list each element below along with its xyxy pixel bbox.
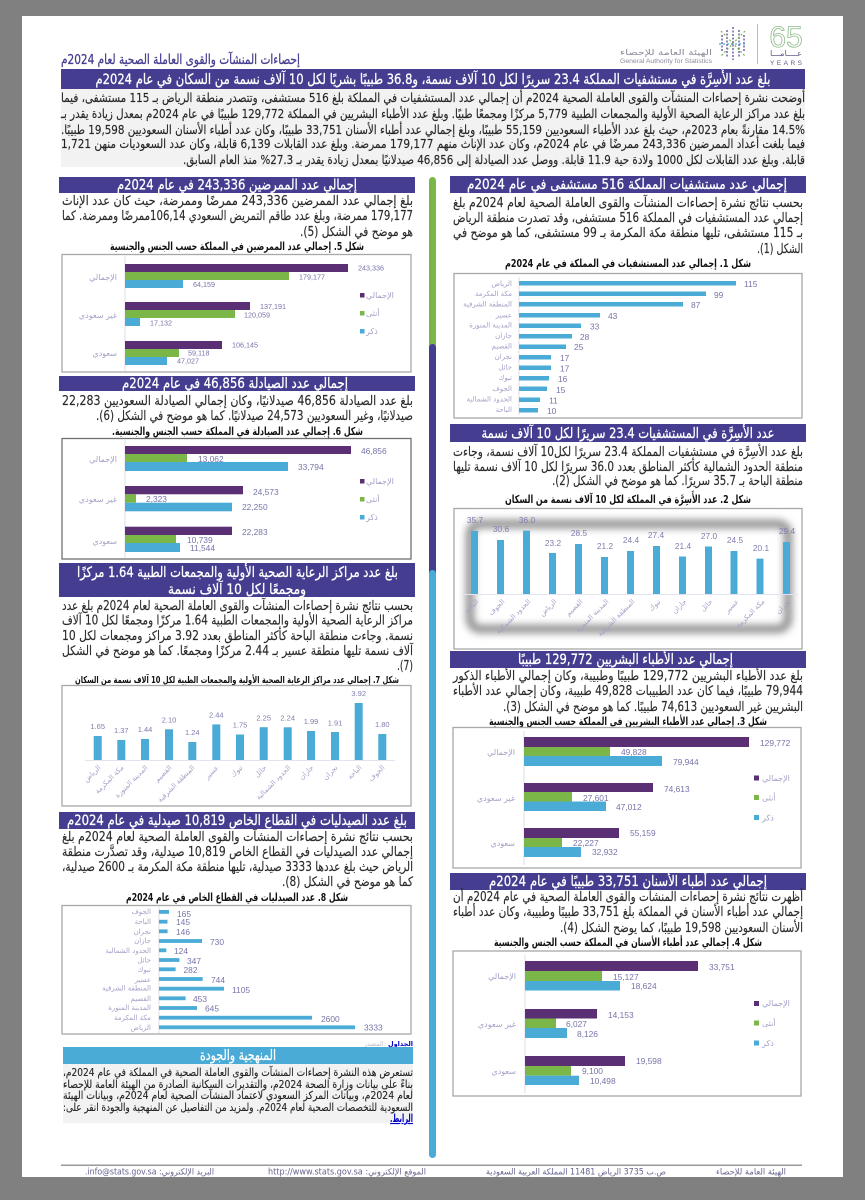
text block: physicians: بلغ عدد الأطباء البشريين 129,772 طبيبًا وطبيبة، وكان إجمالي الأطباء الذكور	[452, 667, 803, 684]
text block: beds: بلغ عدد الأسِرَّة في مستشفيات المملكة 23.4 سريرًا لكل10 آلاف نسمة، وجاءت	[453, 443, 803, 460]
panel: pharmacies	[59, 812, 415, 1048]
column chart: centres per 10,000: 2.25	[256, 714, 271, 722]
column chart: centres per 10,000: الباحة	[346, 764, 363, 781]
logo: General Authority for Statistics 65 years: General Authority for Statistics	[620, 59, 712, 65]
bar chart: nurses by sex and nationality: 64,159	[193, 280, 215, 289]
caption: figure 6: شكل 6. إجمالي عدد الصيادلة في المملكة حسب الجنس والجنسية.	[112, 425, 363, 438]
panel: primary care centres	[59, 563, 415, 806]
column chart: beds per 10,000	[454, 508, 802, 649]
column chart: beds per 10,000: 28.5	[571, 528, 587, 538]
panel: methodology and quality	[63, 1047, 413, 1125]
intro paragraph: فيما بلغت أعداد الممرضين 243,336 ممرضًا في عام 2024م، وكان عدد الإناث منهم 179,177 ممرضة. وبلغ عدد القابلات 6,139 قابلة، وكان عدد السعوديات منهن 1,721	[61, 135, 805, 152]
column chart: beds per 10,000: الجوف	[487, 598, 506, 617]
bar chart: hospitals by region: عسير	[495, 312, 512, 320]
bar chart: pharmacists by sex and nationality: 33,794	[298, 462, 324, 472]
bar chart: nurses by sex and nationality	[62, 254, 411, 372]
bar chart: pharmacies by region: الجوف	[132, 908, 151, 916]
bar chart: dentists by sex and nationality: 6,027	[566, 1019, 587, 1029]
text block: hospitals: بحسب نتائج نشرة إحصاءات المنشآت والقوى العاملة الصحية لعام 2024م بلغ	[453, 194, 803, 211]
column chart: beds per 10,000: 30.6	[493, 524, 509, 534]
text block: pharmacists: بلغ عدد الصيادلة 46,856 صيدلانيًا، وكان إجمالي الصيادلة السعوديين 22,283	[62, 394, 413, 409]
heading: primary care centres: بلغ عدد مراكز الرعاية الصحية الأولية والمجمعات الطبية 1.64 مركزًا	[77, 563, 398, 581]
bar chart: physicians by sex and nationality	[453, 728, 801, 868]
panel: dentists	[450, 871, 806, 1096]
bar chart: pharmacies by region: القصيم	[131, 995, 151, 1003]
column chart: beds per 10,000: 29.4	[779, 526, 795, 536]
text block: nurses	[62, 194, 413, 240]
bar chart: hospitals by region: الرياض	[492, 280, 512, 288]
bar chart: pharmacies by region: 347	[187, 956, 201, 966]
bar chart: dentists by sex and nationality: أنثى	[762, 1018, 776, 1028]
logo: General Authority for Statistics 65 years: الهيئة العامة للإحصاء	[620, 48, 712, 58]
text block: hospitals: الشكل (1).	[757, 242, 803, 257]
caption: figure 1: شكل 1. إجمالي عدد المستشفيات في المملكة في عام 2024م	[505, 257, 751, 270]
bar chart: pharmacies by region: 645	[205, 1004, 219, 1014]
text block: primary care centres: آلاف نسمة تليها منطقة عسير بـ 2.44 مركزًا ومجمعًا. كما هو موضح في الشكل	[62, 642, 414, 659]
bar chart: hospitals by region: القصيم	[492, 342, 512, 350]
bar chart: pharmacies by region: 124	[174, 946, 188, 956]
bar chart: hospitals by region: 11	[549, 396, 558, 406]
column chart: beds per 10,000: عسير	[722, 598, 740, 616]
bar chart: dentists by sex and nationality: غير سعودي	[478, 1020, 516, 1029]
text block: pharmacies: بحسب نتائج نشرة إحصاءات المنشآت والقوى العاملة الصحية لعام 2024م بلغ	[62, 828, 413, 845]
text block: hospitals: إجمالي عدد المستشفيات في المملكة 516 مستشفى، وقد تصدرت منطقة الرياض	[453, 211, 803, 226]
text block: hospitals: بـ 115 مستشفى، تليها منطقة مكة المكرمة بـ 99 مستشفى، كما هو موضح في	[453, 226, 803, 241]
bar chart: pharmacists by sex and nationality	[62, 438, 411, 559]
column chart: centres per 10,000: 3.92	[351, 689, 366, 698]
column chart: centres per 10,000: 1.99	[304, 717, 318, 726]
bar chart: hospitals by region: الحدود الشمالية	[466, 396, 512, 404]
main headline band: بلغ عدد الأَسِرَّة في مستشفيات المملكة 23.4 سريرًا لكل 10 آلاف نسمة، و36.8 طبيبًا بشريًا لكل 10 آلاف نسمة من السكان في عام 2024م	[96, 67, 770, 88]
footer: الموقع الإلكتروني: http://www.stats.gov.sa	[268, 1168, 426, 1178]
bar chart: nurses by sex and nationality: 17,132	[150, 318, 172, 328]
text block: beds: منطقة الحدود الشمالية كأكثر المناطق بعدد 36.0 سريرًا لكل 10 آلاف نسمة تليها	[453, 457, 803, 475]
text block: nurses: بلغ إجمالي عدد الممرضين 243,336 ممرضًا وممرضة، حيث كان عدد الإناث	[62, 194, 413, 209]
text block: physicians	[452, 667, 803, 715]
column chart: centres per 10,000: الجوف	[367, 764, 386, 783]
bar chart: pharmacies by region: تبوك	[138, 966, 151, 974]
bar chart: hospitals by region: جازان	[495, 332, 512, 340]
column chart: centres per 10,000: 2.44	[209, 710, 224, 720]
bar chart: dentists by sex and nationality: سعودي	[491, 1067, 516, 1076]
bar chart: pharmacies by region: 1105	[232, 985, 250, 995]
bar chart: pharmacies by region: الرياض	[131, 1024, 151, 1032]
text block: dentists	[453, 888, 803, 936]
column chart: centres per 10,000: حائل	[253, 764, 268, 779]
column chart: centres per 10,000: 1.24	[185, 728, 200, 737]
column chart: centres per 10,000: 1.37	[114, 726, 129, 735]
column chart: centres per 10,000: تبوك	[229, 764, 244, 779]
column chart: beds per 10,000: حائل	[699, 598, 714, 613]
bar chart: physicians by sex and nationality: غير سعودي	[477, 794, 515, 803]
text block: pharmacies: كما هو موضح في الشكل (8).	[282, 875, 414, 890]
column chart: beds per 10,000: 24.4	[623, 535, 639, 545]
footer: الهيئة العامة للإحصاء	[716, 1168, 786, 1178]
heading: methodology	[63, 1047, 413, 1064]
bar chart: nurses by sex and nationality: 243,336	[358, 264, 384, 272]
heading: primary care centres: ومجمعًا لكل 10 آلاف نسمة	[168, 580, 306, 598]
bar chart: nurses by sex and nationality: الإجمالي	[89, 273, 117, 283]
text block: dentists: أظهرت نتائج نشرة إحصاءات المنشآت والقوى العاملة الصحية في عام 2024م أن	[453, 888, 803, 905]
column chart: centres per 10,000: الرياض	[82, 764, 102, 784]
bar chart: dentists by sex and nationality: 14,153	[608, 1010, 634, 1020]
bar chart: nurses by sex and nationality: 179,177	[299, 272, 325, 282]
column chart: beds per 10,000: المدينة المنورة	[575, 598, 610, 634]
icon: snowflake emblem	[719, 27, 747, 60]
heading: pharmacists: إجمالي عدد الصيادلة 46,856 في عام 2024م	[122, 376, 348, 392]
bar chart: nurses by sex and nationality: 106,145	[232, 340, 258, 350]
bar chart: hospitals by region: 15	[556, 385, 566, 395]
heading: primary care centres	[59, 563, 415, 598]
bar chart: physicians by sex and nationality: أنثى	[762, 792, 776, 802]
panel: hospital beds	[450, 421, 806, 649]
bar chart: physicians by sex and nationality: ذكر	[761, 814, 774, 822]
bar chart: physicians by sex and nationality: الإجمالي	[487, 748, 515, 758]
column chart: centres per 10,000: 1.80	[375, 720, 390, 729]
column chart: beds per 10,000: 21.2	[597, 541, 613, 551]
caption: figure 2: شكل 2. عدد الأَسِرَّة في المملكة لكل 10 آلاف نسمة من السكان	[505, 491, 751, 506]
bar chart: nurses by sex and nationality: أنثى	[366, 308, 380, 318]
bar chart: pharmacists by sex and nationality: 46,856	[361, 446, 387, 456]
bar chart: pharmacists by sex and nationality: الإجمالي	[89, 455, 117, 465]
bar chart: physicians by sex and nationality: سعودي	[490, 839, 515, 848]
column chart: beds per 10,000: تبوك	[647, 598, 662, 613]
bar chart: nurses by sex and nationality: 59,118	[188, 348, 209, 358]
text block: primary care centres: نسمة. وجاءت منطقة الباحة كأكثر المناطق بعدد 3.92 مراكز ومجمعات لكل 10	[62, 626, 413, 644]
bar chart: hospitals by region: 25	[574, 342, 584, 352]
heading: beds: عدد الأَسِرَّة في المستشفيات 23.4 سريرًا لكل 10 آلاف نسمة	[482, 421, 774, 442]
text block: dentists: إجمالي عدد أطباء الأسنان في المملكة بلغ 33,751 طبيبًا وطبيبة، وكان عدد أطباء	[453, 903, 803, 920]
bar chart: physicians by sex and nationality: 22,227	[573, 838, 599, 848]
bar chart: dentists by sex and nationality: 9,100	[582, 1066, 603, 1076]
bar chart: pharmacies by region: مكة المكرمة	[114, 1014, 151, 1022]
column chart: beds per 10,000: 21.4	[675, 541, 691, 551]
text block: physicians: 79,944 طبيبًا، فيما كان عدد الطبيبات 49,828 طبيبة، وكان إجمالي عدد الأطباء	[453, 682, 803, 699]
bar chart: pharmacies by region: 744	[211, 975, 225, 985]
panel: nurses	[59, 177, 415, 372]
text block: beds	[453, 443, 803, 489]
bar chart: pharmacies by region: 2600	[321, 1014, 340, 1024]
column chart: beds per 10,000: 36.0	[519, 515, 535, 525]
bar chart: pharmacies by region: الحدود الشمالية	[106, 947, 151, 955]
text block: primary care centres: مراكز الرعاية الصحية الأولية والمجمعات الطبية 1.64 مركزًا ومجمعًا لكل 10 آلاف	[62, 612, 413, 628]
bar chart: hospitals by region: 99	[714, 290, 724, 300]
bar chart: dentists by sex and nationality: 8,126	[577, 1029, 598, 1039]
column chart: beds per 10,000: 27.4	[648, 530, 664, 540]
panel: pharmacists	[59, 376, 415, 559]
bar chart: pharmacies by region: 282	[184, 965, 198, 975]
bar chart: hospitals by region: 43	[608, 311, 618, 321]
bar chart: pharmacists by sex and nationality: 10,739	[187, 535, 213, 545]
bar chart: physicians by sex and nationality: 79,944	[673, 757, 699, 767]
bar chart: pharmacies by region: 3333	[364, 1022, 383, 1032]
column chart: centres per 10,000: 1.75	[233, 720, 247, 730]
bar chart: pharmacies by region: نجران	[134, 928, 151, 936]
bar chart: nurses by sex and nationality: 47,027	[177, 356, 199, 366]
column chart: beds per 10,000: 35.7	[467, 515, 483, 525]
bar chart: physicians by sex and nationality: 49,828	[621, 747, 647, 757]
bar chart: nurses by sex and nationality: الإجمالي	[366, 291, 394, 301]
text block: hospitals	[453, 194, 803, 257]
text block: nurses: 179,177 ممرضة، وبلغ عدد طاقم التمريض السعودي 106,14ممرضًا وممرضة. كما	[62, 209, 413, 224]
bar chart: dentists by sex and nationality: الإجمالي	[488, 972, 516, 982]
column chart: centres per 10,000: نجران	[321, 764, 339, 782]
bar chart: pharmacies by region	[62, 906, 411, 1034]
bar chart: pharmacies by region: حائل	[137, 956, 151, 964]
intro paragraph	[60, 89, 805, 168]
logo: General Authority for Statistics 65 years: عــــامـــا	[770, 49, 802, 58]
column chart: centres per 10,000: القصيم	[153, 764, 173, 784]
bar chart: pharmacies by region: 453	[193, 994, 207, 1004]
caption: figure 5: شكل 5. إجمالي عدد الممرضين في المملكة حسب الجنس والجنسية	[110, 240, 364, 253]
column divider	[429, 177, 436, 1158]
column chart: centres per 10,000: 1.65	[90, 722, 105, 731]
bar chart: nurses by sex and nationality: ذكر	[365, 327, 378, 336]
column chart: centres per 10,000: 1.91	[328, 718, 342, 728]
bar chart: pharmacists by sex and nationality: 2,323	[146, 494, 167, 504]
heading: hospitals: إجمالي عدد مستشفيات المملكة 516 مستشفى في عام 2024م	[467, 177, 787, 193]
bar chart: pharmacies by region: المدينة المنورة	[108, 1004, 151, 1012]
column chart: beds per 10,000: مكة المكرمة	[735, 598, 767, 630]
bar chart: hospitals by region: نجران	[495, 353, 512, 361]
bar chart: hospitals by region: 17	[560, 364, 570, 374]
bar chart: hospitals by region: مكة المكرمة	[475, 290, 512, 298]
intro paragraph: 14.5% مقارنةً بعام 2023م، حيث بلغ عدد الأطباء السعوديين 55,159 طبيبًا، وبلغ إجمالي عدد أطباء الأسنان 33,751 طبيبًا، وكان عدد أطباء الأسنان السعوديين 19,598 طبيبًا.	[61, 121, 805, 138]
bar chart: dentists by sex and nationality: 19,598	[636, 1056, 662, 1066]
text block: primary care centres: بحسب نتائج نشرة إحصاءات المنشآت والقوى العاملة الصحية لعام 2024م بلغ عدد	[62, 597, 413, 614]
bar chart: pharmacies by region: الباحة	[135, 918, 151, 926]
text block: pharmacies	[62, 828, 414, 890]
bar chart: physicians by sex and nationality: 32,932	[592, 847, 618, 857]
main headline band	[61, 67, 805, 89]
bar chart: hospitals by region: الجوف	[493, 385, 512, 393]
heading: pharmacies: بلغ عدد الصيدليات في القطاع الخاص 10,819 صيدلية في عام 2024م	[67, 813, 407, 829]
bar chart: pharmacies by region: عسير	[134, 976, 151, 984]
bar chart: hospitals by region: تبوك	[499, 374, 512, 382]
source note: الجداول :المصدر	[363, 1040, 413, 1048]
column chart: centres per 10,000: 1.44	[138, 725, 152, 734]
panel: physicians	[450, 650, 806, 868]
bar chart: pharmacists by sex and nationality: 22,283	[242, 527, 268, 537]
bar chart: hospitals by region: 115	[744, 279, 758, 289]
footer: البريد الإلكتروني: info@stats.gov.sa.	[85, 1168, 214, 1178]
bar chart: pharmacists by sex and nationality: 13,062	[198, 454, 224, 464]
bar chart: pharmacies by region: 146	[176, 927, 190, 937]
text block: beds: منطقة الباحة بـ 35.7 سريرًا. كما هو موضح في الشكل (2).	[552, 474, 803, 489]
bar chart: pharmacies by region: جازان	[134, 937, 151, 945]
column chart: beds per 10,000: الرياض	[538, 598, 558, 618]
column chart: centres per 10,000: 2.24	[280, 714, 295, 722]
heading: physicians: إجمالي عدد الأطباء البشريين 129,772 طبيبًا	[518, 650, 733, 668]
bar chart: pharmacies by region: 145	[176, 917, 190, 927]
heading: beds	[450, 421, 806, 442]
bar chart: physicians by sex and nationality: 74,613	[664, 784, 690, 794]
bar chart: hospitals by region: المدينة المنورة	[469, 322, 512, 330]
panel: hospitals	[450, 176, 806, 418]
bar chart: pharmacies by region: المنطقة الشرقية	[102, 984, 151, 992]
text block: methodology: لعام 2024م، وبيانات المركز السعودي لاعتماد المنشآت الصحية لعام 2024م، وبيانات الهيئة	[63, 1088, 413, 1102]
bar chart: pharmacies by region: 730	[210, 937, 224, 947]
text block: pharmacies: الرياض حيث بلغ عددها 3333 صيدلية، تليها منطقة مكة المكرمة بـ 2600 صيدلية،	[62, 860, 413, 875]
bar chart: hospitals by region: 17	[560, 353, 570, 363]
heading: dentists: إجمالي عدد أطباء الأسنان 33,751 طبيبًا في عام 2024م	[489, 871, 767, 890]
heading: physicians	[450, 650, 806, 668]
bar chart: pharmacists by sex and nationality: غير سعودي	[79, 495, 117, 504]
anniversary number 65: 65	[769, 21, 803, 54]
bar chart: pharmacists by sex and nationality: 22,250	[242, 502, 268, 512]
column chart: beds per 10,000: 23.2	[545, 538, 561, 548]
bar chart: pharmacists by sex and nationality: أنثى	[366, 494, 380, 504]
text block: methodology: الرابط.	[390, 1112, 413, 1125]
caption: figure 3: شكل 3. إجمالي عدد الأطباء البشريين في المملكة حسب الجنس والجنسية	[489, 714, 767, 728]
text block: methodology: تستعرض هذه النشرة إحصاءات المنشآت والقوى العاملة الصحية في المملكة في عام 2024م،	[63, 1065, 413, 1079]
text block: pharmacists	[62, 394, 413, 424]
caption: figure 7: شكل 7. إجمالي عدد مراكز الرعاية الصحية الأولية والمجمعات الطبية لكل 10 آلاف نسمة من السكان	[75, 673, 399, 686]
intro paragraph: قابلة. وبلغ عدد القابلات لكل 1000 ولادة حية 11.9 قابلة. ووصل عدد الصيادلة إلى 46,856 صيدلانيًا بمعدل زيادة يقدر بـ 27.3% منذ العام السابق.	[183, 152, 805, 168]
bar chart: physicians by sex and nationality: الإجمالي	[762, 774, 790, 784]
column chart: beds per 10,000: نجران	[774, 598, 792, 616]
bar chart: hospitals by region: 10	[547, 406, 557, 416]
column chart: centres per 10,000: الحدود الشمالية	[255, 764, 292, 802]
bar chart: physicians by sex and nationality: 27,601	[583, 793, 609, 803]
bar chart: hospitals by region: حائل	[498, 364, 512, 372]
caption: figure 4: شكل 4. إجمالي عدد أطباء الأسنان في المملكة حسب الجنس والجنسية	[494, 935, 762, 949]
bar chart: dentists by sex and nationality: الإجمالي	[762, 999, 790, 1009]
text block: primary care centres	[62, 597, 414, 674]
column chart: centres per 10,000: 2.10	[162, 716, 176, 724]
bar chart: pharmacists by sex and nationality: ذكر	[365, 513, 378, 522]
bar chart: pharmacists by sex and nationality: الإجمالي	[366, 477, 394, 487]
column chart: centres per 10,000	[62, 686, 411, 806]
intro paragraph: بلغ عدد مراكز الرعاية الصحية الأولية والمجمعات الطبية 5,779 مركزًا ومجمعًا طبيًا. وبلغ عدد الأطباء البشريين في المملكة 129,772 طبيبًا في عام 2024م بمعدل زيادة يقدر بـ	[60, 106, 805, 122]
bar chart: nurses by sex and nationality: سعودي	[92, 349, 117, 358]
text block: pharmacies: إجمالي عدد الصيدليات في القطاع الخاص 10,819 صيدلية، وقد تصدَّرت منطقة	[62, 843, 413, 860]
column chart: beds per 10,000: 27.0	[701, 531, 717, 541]
column chart: beds per 10,000: 20.1	[753, 543, 769, 553]
caption: figure 8: شكل 8. عدد الصيدليات في القطاع الخاص في عام 2024م	[126, 891, 348, 904]
column chart: beds per 10,000: جازان	[671, 598, 688, 615]
column chart: centres per 10,000: مكة المكرمة	[94, 764, 126, 796]
bar chart: hospitals by region: المنطقة الشرقية	[463, 300, 512, 308]
bar chart: dentists by sex and nationality	[453, 951, 801, 1096]
bar chart: hospitals by region: 33	[590, 322, 600, 332]
text block: physicians: البشريين غير السعوديين 74,613 طبيبًا. كما هو موضح في الشكل (3).	[503, 700, 803, 715]
bar chart: hospitals by region: 28	[580, 332, 590, 342]
bar chart: hospitals by region: 87	[691, 300, 701, 310]
heading: methodology: المنهجية والجودة	[200, 1048, 276, 1064]
logo: General Authority for Statistics 65 years: YEARS	[770, 60, 803, 67]
bar chart: dentists by sex and nationality: 18,624	[631, 981, 657, 991]
text block: pharmacists: صيدلانيًا، وغير السعوديين 24,573 صيدلانيًا. كما هو موضح في الشكل (6).	[96, 409, 413, 424]
text block: methodology: السعودية للتخصصات الصحية لعام 2024م. ولمزيد من التفاصيل عن المنهجية والجودة انقر على:	[63, 1101, 413, 1114]
bar chart: physicians by sex and nationality: 129,772	[760, 738, 791, 748]
bar chart: physicians by sex and nationality: 47,012	[616, 802, 642, 812]
footer	[61, 1164, 802, 1178]
footer: ص.ب 3735 الرياض 11481 المملكة العربية السعودية	[486, 1168, 666, 1178]
text block: primary care centres: (7).	[397, 659, 413, 674]
column chart: beds per 10,000: المنطقة الشرقية	[596, 598, 636, 638]
bar chart: nurses by sex and nationality: 120,059	[244, 310, 270, 320]
bar chart: nurses by sex and nationality: 137,191	[260, 302, 286, 311]
column chart: centres per 10,000: عسير	[202, 764, 220, 782]
bar chart: nurses by sex and nationality: غير سعودي	[79, 311, 117, 320]
bar chart: dentists by sex and nationality: 15,127	[613, 972, 639, 982]
text block: methodology	[63, 1064, 413, 1125]
bar chart: hospitals by region: الباحة	[496, 406, 512, 414]
bar chart: pharmacies by region: 165	[177, 909, 191, 919]
bar chart: hospitals by region: 16	[558, 374, 568, 384]
column chart: centres per 10,000: المنطقة الشرقية	[156, 764, 196, 804]
column chart: beds per 10,000: 24.5	[727, 535, 743, 545]
column chart: beds per 10,000: القصيم	[564, 598, 584, 618]
bar chart: physicians by sex and nationality: 55,159	[630, 828, 656, 838]
column chart: beds per 10,000: الحدود الشمالية	[495, 598, 532, 636]
bar chart: dentists by sex and nationality: 33,751	[709, 962, 735, 972]
column chart: beds per 10,000: الباحة	[463, 598, 480, 615]
logo: General Authority for Statistics 65 years	[620, 21, 803, 67]
text block: methodology: بناءً على بيانات وزارة الصحة 2024م، والتقديرات السكانية الصادرة من الهيئة العامة للإحصاء	[63, 1078, 413, 1091]
bar chart: pharmacists by sex and nationality: 11,544	[190, 543, 215, 553]
column chart: centres per 10,000: المدينة المنورة	[114, 764, 149, 800]
title: إحصاءات المنشآت والقوى العاملة الصحية لعام 2024م	[61, 51, 300, 68]
bar chart: pharmacists by sex and nationality: 24,573	[253, 487, 279, 497]
bar chart: hospitals by region	[454, 274, 802, 418]
bar chart: pharmacists by sex and nationality: سعودي	[92, 537, 117, 546]
heading: nurses: إجمالي عدد الممرضين 243,336 في عام 2024م	[117, 178, 357, 194]
bar chart: dentists by sex and nationality: 10,498	[590, 1076, 616, 1086]
column chart: centres per 10,000: جازان	[298, 764, 315, 781]
bar chart: dentists by sex and nationality: ذكر	[761, 1039, 774, 1048]
text block: nurses: هو موضح في الشكل (5).	[300, 225, 413, 240]
intro paragraph: أوضحت نشرة إحصاءات المنشآت والقوى العاملة الصحية 2024م أن إجمالي عدد المستشفيات في المملكة بلغ 516 مستشفى، وتتصدر منطقة الرياض بـ 115 مستشفى، فيما	[61, 89, 805, 106]
text block: dentists: الأسنان السعوديين 19,598 طبيبًا، كما يوضح الشكل (4).	[560, 919, 803, 936]
